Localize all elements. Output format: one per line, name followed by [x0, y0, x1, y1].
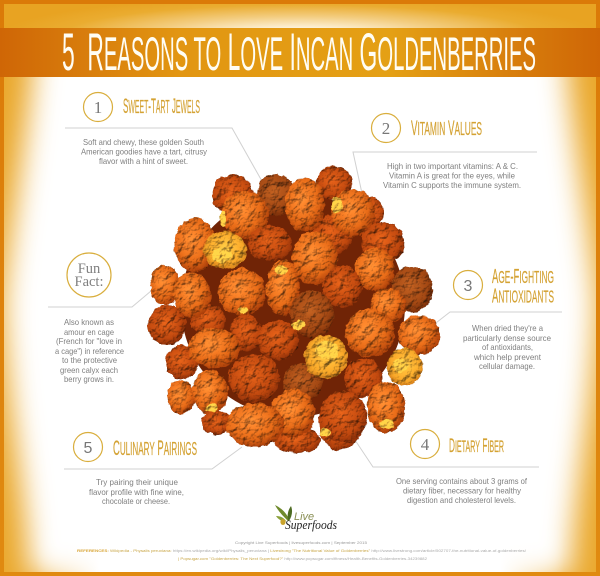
section 4: dietary fiber — [396, 430, 528, 505]
goldenberries pile — [148, 166, 440, 453]
references line 1: REFERENCES: Wikipedia - Physalis peruviana: https://en.wikipedia.org/wiki/Physalis_peruviana | Livestrong "The Nutritional Value of Goldenberries" http://www.livestrong.com/article/502707-the-nutritional-value-of-goldenberries/ — [77, 549, 527, 553]
berries — [148, 166, 440, 453]
body 3: When dried they're a — [472, 323, 543, 333]
body 3: of antioxidants, — [482, 342, 533, 352]
number badge 2: 2 — [382, 119, 390, 138]
title banner — [0, 23, 600, 82]
heading 2: VITAMIN VALUES — [411, 117, 482, 140]
fun fact badge: Fact: — [74, 274, 104, 290]
body 4 — [396, 476, 528, 505]
section 3: age-fighting antioxidants — [454, 266, 554, 371]
fun fact body — [55, 317, 124, 384]
body 5 — [89, 477, 184, 506]
body 3: cellular damage. — [479, 361, 535, 371]
fun fact body: (French for "love in — [56, 336, 122, 346]
heading 3 — [492, 266, 554, 308]
body 2: High in two important vitamins: A & C. — [387, 161, 518, 171]
heading 3: AGE-FIGHTING — [492, 266, 554, 288]
section 2: vitamin values — [372, 114, 521, 190]
body 5: Try pairing their unique — [96, 477, 178, 487]
fun fact badge: Fun — [78, 261, 101, 277]
heading 4: DIETARY FIBER — [449, 436, 504, 457]
body 4: digestion and cholesterol levels. — [407, 495, 516, 505]
body 1: American goodies have a tart, citrusy — [81, 146, 208, 156]
body 1: flavor with a hint of sweet. — [99, 156, 188, 166]
body 3: particularly dense source — [463, 333, 551, 343]
body 2: Vitamin A is great for the eyes, while — [389, 170, 515, 180]
heading 1: SWEET-TART JEWELS — [123, 95, 200, 118]
fun fact body: to the protective — [62, 355, 117, 365]
number badge 1: 1 — [94, 98, 102, 117]
dark base of pile — [181, 193, 405, 417]
body 2: Vitamin C supports the immune system. — [383, 180, 521, 190]
leader lines — [48, 128, 562, 469]
fun fact — [55, 253, 124, 384]
yellow calyx patches — [206, 197, 408, 436]
fun fact badge — [67, 253, 111, 297]
body 1: Soft and chewy, these golden South — [83, 137, 204, 147]
body 2 — [383, 161, 521, 190]
logo: live superfoods: Superfoods — [285, 518, 337, 532]
body 1 — [81, 137, 208, 166]
section 1: sweet-tart jewels — [81, 92, 208, 166]
fun fact body: a cage") in reference — [55, 346, 124, 356]
fun fact body: amour en cage — [64, 327, 114, 337]
fun fact body: berry grows in. — [64, 374, 114, 384]
fun fact body: Also known as — [64, 317, 114, 327]
number badge 4: 4 — [421, 435, 430, 454]
body 5: flavor profile with fine wine, — [89, 487, 184, 497]
number badge 3: 3 — [464, 278, 473, 295]
heading 5: CULINARY PAIRINGS — [113, 437, 197, 460]
logo: live superfoods — [275, 505, 337, 532]
copyright: Copyright Live Superfoods | livesuperfoods.com | September 2015 — [235, 541, 367, 545]
references line 2: | Popsugar.com "Goldenberries: The Next Superfood?" http://www.popsugar.com/fitness/Health-Benefits-Goldenberries-34239882 — [178, 557, 427, 561]
body 4: dietary fiber, necessary for healthy — [403, 486, 522, 496]
copyright and references — [77, 541, 527, 561]
body 3 — [463, 323, 551, 371]
body 5: chocolate or cheese. — [102, 496, 170, 506]
number badge 5: 5 — [84, 440, 93, 457]
number badge 2 — [372, 114, 400, 142]
body 4: One serving contains about 3 grams of — [396, 476, 528, 486]
icon: olive leaves — [275, 505, 292, 525]
fun fact body: green calyx each — [60, 365, 118, 375]
logo wordmark: Live — [294, 511, 314, 523]
section 5: culinary pairings — [74, 432, 197, 506]
body 3: which help prevent — [473, 352, 542, 362]
